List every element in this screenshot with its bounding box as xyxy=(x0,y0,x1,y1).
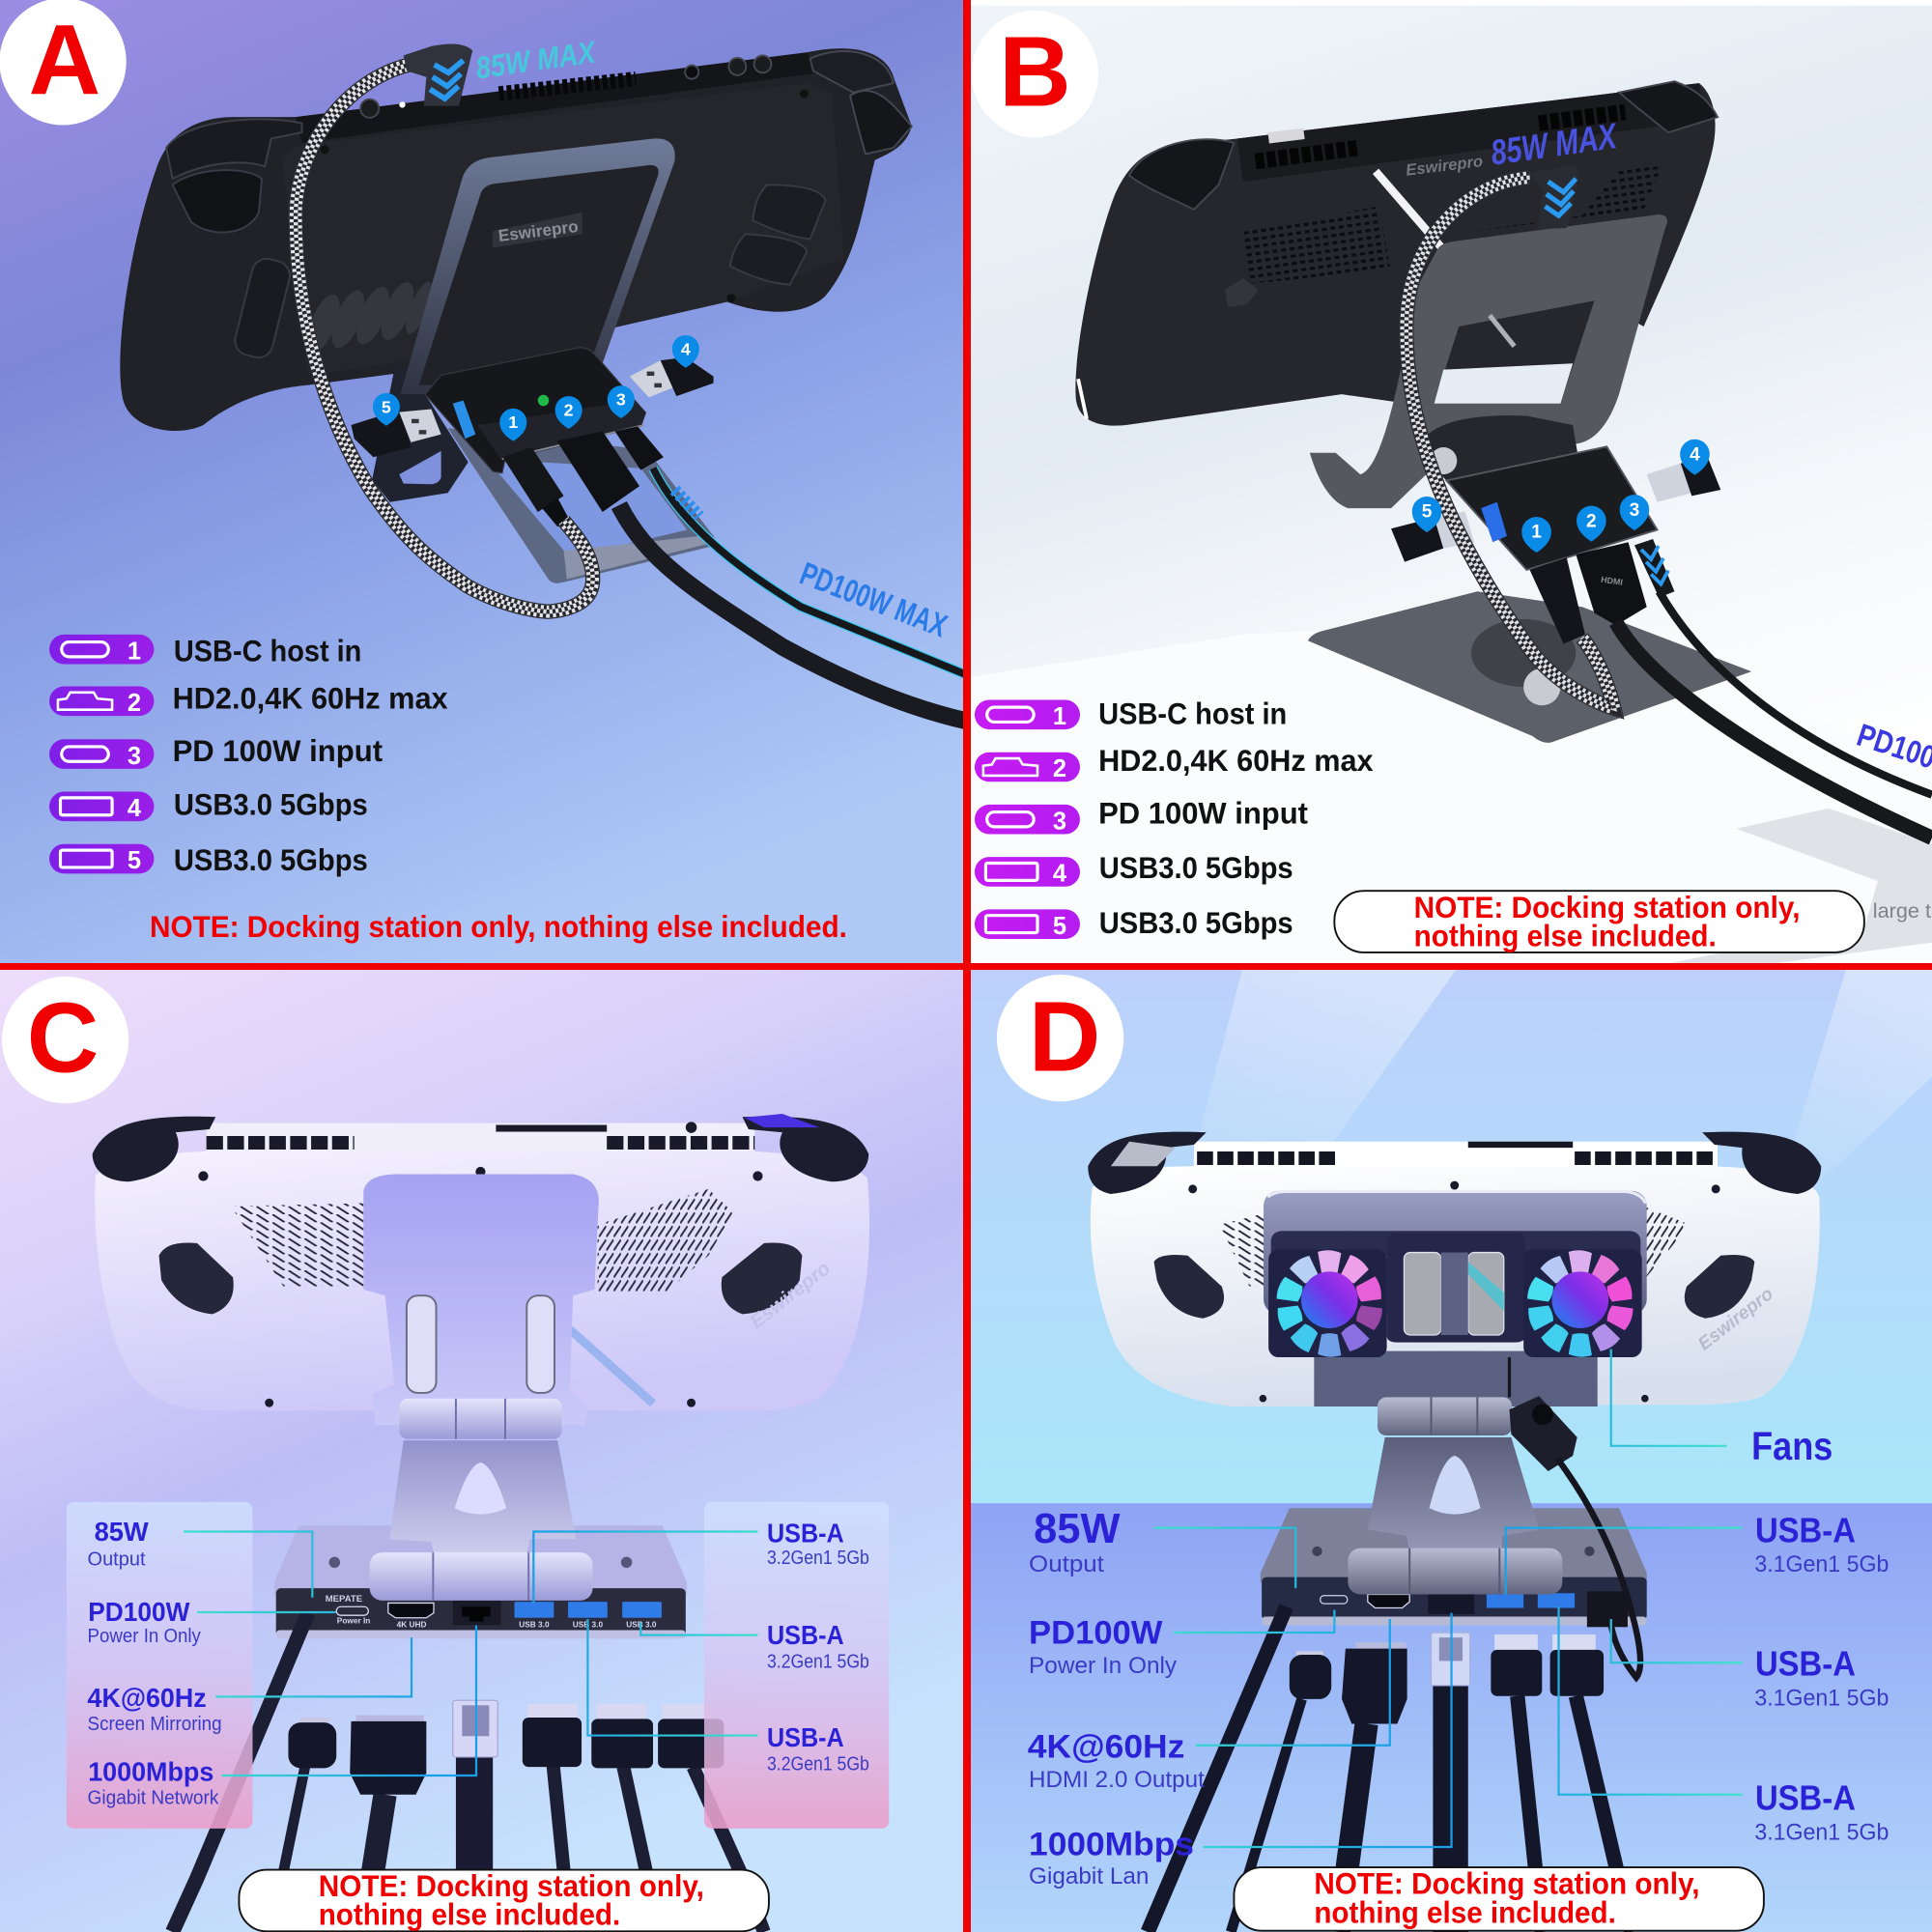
port pin 1 xyxy=(499,409,526,441)
port pin 3: 3 xyxy=(616,390,626,410)
legend row 1: USB-C host in xyxy=(1098,696,1287,730)
left labels D: PD100W xyxy=(1029,1615,1163,1652)
legend row 3: 3 xyxy=(1053,808,1066,835)
dock hub A xyxy=(425,348,664,526)
USB dongles B xyxy=(1391,459,1720,562)
legend row 2 xyxy=(49,680,448,717)
right labels D: USB-A xyxy=(1755,1511,1856,1549)
legend row 5: USB3.0 5Gbps xyxy=(174,842,368,877)
red divider horizontal xyxy=(0,963,1932,970)
dock body C: USB 3.0 xyxy=(519,1619,550,1629)
panel C: white handheld dock with cables xyxy=(0,970,963,1932)
port pin 3 xyxy=(608,385,635,418)
device B xyxy=(1075,81,1718,426)
legend row 3 xyxy=(49,733,383,770)
USB dongles A xyxy=(352,357,714,457)
right labels C: 3.2Gen1 5Gb xyxy=(767,1548,869,1569)
legend row 1: 1 xyxy=(1053,703,1066,730)
badge D: D xyxy=(1029,980,1100,1092)
port pin 2: 2 xyxy=(564,400,574,419)
dock body C: Power In xyxy=(337,1615,370,1625)
port pin 4: 4 xyxy=(1690,444,1700,465)
right labels C xyxy=(767,1518,869,1775)
port pin 3: 3 xyxy=(1630,500,1639,521)
legend row 1 xyxy=(975,696,1287,730)
dock hub B: HDMI xyxy=(1601,575,1624,587)
right labels C: USB-A xyxy=(767,1620,844,1650)
right fan xyxy=(1526,1250,1634,1357)
legend row 3: 3 xyxy=(128,743,141,770)
legend row 4: USB3.0 5Gbps xyxy=(174,787,368,822)
left labels C: 4K@60Hz xyxy=(88,1683,207,1713)
dock body D xyxy=(1261,1508,1647,1627)
left labels C: Gigabit Network xyxy=(88,1787,219,1808)
note B: NOTE: Docking station only, xyxy=(1414,890,1801,924)
port pin 3 xyxy=(1620,495,1649,530)
legend row 3 xyxy=(975,796,1308,835)
power labels A: 85W MAX xyxy=(473,34,599,86)
power labels A xyxy=(473,34,952,644)
note D xyxy=(1234,1865,1764,1931)
right labels D: USB-A xyxy=(1755,1779,1856,1818)
info box right C xyxy=(704,1502,889,1829)
badge D xyxy=(997,975,1123,1101)
device C xyxy=(93,1114,869,1411)
left labels D: 4K@60Hz xyxy=(1028,1729,1184,1766)
legend row 5: 5 xyxy=(1053,913,1066,940)
note A: NOTE: Docking station only, nothing else included. xyxy=(150,909,847,944)
right labels D: 3.1Gen1 5Gb xyxy=(1754,1819,1889,1845)
port pin 2 xyxy=(1577,506,1606,542)
panel D: handheld dock with cooling fans xyxy=(971,970,1932,1932)
right labels D: USB-A xyxy=(1755,1645,1856,1684)
dock body C: USB 3.0 xyxy=(573,1619,603,1629)
left labels D: Power In Only xyxy=(1029,1653,1178,1679)
left labels D: HDMI 2.0 Output xyxy=(1029,1767,1205,1793)
left labels D: 1000Mbps xyxy=(1029,1826,1194,1862)
L plug A xyxy=(404,43,472,106)
port pin 4 xyxy=(1680,440,1710,475)
stand D xyxy=(1264,1191,1647,1551)
callout lines D xyxy=(1154,1350,1743,1847)
legend row 1: USB-C host in xyxy=(174,633,361,668)
port pin 2 xyxy=(555,396,582,429)
port pin 5: 5 xyxy=(382,397,391,416)
device A xyxy=(120,48,912,431)
panel B: ROG Ally dock on swivel stand: large t xyxy=(1873,898,1931,923)
legend row 2: 2 xyxy=(1053,755,1066,782)
fan switch and cable D xyxy=(1509,1357,1640,1678)
panel A: Steam Deck dock xyxy=(0,0,963,963)
legend row 4: USB3.0 5Gbps xyxy=(1099,850,1293,885)
legend row 5: 5 xyxy=(128,847,141,874)
legend row 3: PD 100W input xyxy=(173,733,383,768)
device D xyxy=(1088,1132,1821,1406)
legend row 3: PD 100W input xyxy=(1098,796,1308,831)
stand A: Eswirepro xyxy=(497,216,580,245)
badge C xyxy=(2,977,128,1103)
port pin 1: 1 xyxy=(1531,523,1542,543)
base plate B xyxy=(1308,591,1751,743)
badge B xyxy=(972,11,1098,137)
right labels D xyxy=(1754,1511,1889,1845)
cables B xyxy=(1406,178,1932,838)
left labels D xyxy=(1028,1506,1205,1889)
port pin 4 xyxy=(672,335,699,368)
left labels D: Gigabit Lan xyxy=(1029,1863,1149,1889)
port pin 5 xyxy=(373,393,400,426)
callout lines C xyxy=(184,1531,757,1776)
badge C: C xyxy=(27,981,99,1094)
power labels B: 85W MAX xyxy=(1489,116,1621,173)
right labels C: 3.2Gen1 5Gb xyxy=(767,1753,869,1775)
panel B: ROG Ally dock on swivel stand xyxy=(971,6,1932,963)
red divider vertical xyxy=(963,0,971,1932)
legend row 4 xyxy=(49,787,368,822)
port pin 5 xyxy=(1412,497,1441,532)
device B: Eswirepro xyxy=(1405,152,1484,180)
dock body C xyxy=(274,1525,687,1638)
left labels C: Screen Mirroring xyxy=(88,1714,222,1735)
legend row 4: 4 xyxy=(128,795,142,822)
dock hinge C xyxy=(370,1552,593,1601)
port pin 5: 5 xyxy=(1422,502,1433,523)
left labels C: Power In Only xyxy=(88,1626,202,1647)
left labels C: Output xyxy=(88,1549,146,1571)
legend row 1 xyxy=(49,633,361,668)
left labels C: 1000Mbps xyxy=(88,1757,213,1787)
legend row 4: 4 xyxy=(1053,861,1067,888)
legend row 1: 1 xyxy=(128,638,141,665)
legend row 4 xyxy=(975,850,1293,888)
port pin 1: 1 xyxy=(508,412,518,432)
fans label: Fans xyxy=(1751,1424,1833,1468)
legend row 2: HD2.0,4K 60Hz max xyxy=(173,680,448,715)
right labels C: USB-A xyxy=(767,1518,844,1548)
port pin 2: 2 xyxy=(1586,511,1597,531)
note B: nothing else included. xyxy=(1414,919,1717,953)
device C: Eswirepro xyxy=(747,1258,835,1333)
stand A xyxy=(372,138,715,583)
stand C xyxy=(363,1175,653,1554)
info box left C xyxy=(67,1502,252,1829)
L plug B xyxy=(1530,165,1579,229)
power labels B xyxy=(1489,116,1932,777)
legend row 5: USB3.0 5Gbps xyxy=(1099,905,1293,940)
cables A xyxy=(296,65,966,721)
left labels C xyxy=(88,1517,222,1808)
dock hinge D xyxy=(1348,1548,1562,1595)
left labels D: Output xyxy=(1029,1551,1104,1577)
device D: Eswirepro xyxy=(1694,1284,1777,1355)
left fan xyxy=(1275,1250,1384,1357)
fan unit D xyxy=(1268,1231,1642,1357)
legend row 2: HD2.0,4K 60Hz max xyxy=(1098,743,1374,778)
right labels D: 3.1Gen1 5Gb xyxy=(1754,1551,1889,1577)
badge A xyxy=(0,0,127,125)
note C xyxy=(239,1868,769,1931)
dock hub B xyxy=(1446,446,1674,643)
note B xyxy=(1334,890,1864,953)
note C: NOTE: Docking station only, xyxy=(319,1868,704,1903)
legend row 5 xyxy=(975,905,1293,940)
right labels D: 3.1Gen1 5Gb xyxy=(1754,1685,1889,1711)
dock body C: MEPATE xyxy=(326,1594,362,1605)
dock body C: 4K UHD xyxy=(397,1619,426,1629)
port pin 1 xyxy=(1521,517,1551,553)
note C: nothing else included. xyxy=(319,1896,620,1931)
legend row 2: 2 xyxy=(128,690,141,717)
port pin 4: 4 xyxy=(681,339,691,358)
dock body C: USB 3.0 xyxy=(626,1619,657,1629)
note D: NOTE: Docking station only, xyxy=(1314,1865,1700,1900)
cables and connectors D xyxy=(1148,1606,1632,1932)
badge A: A xyxy=(29,3,100,115)
legend row 2 xyxy=(975,743,1374,782)
note D: nothing else included. xyxy=(1314,1894,1616,1929)
badge B: B xyxy=(999,15,1071,128)
stand B xyxy=(1310,214,1667,508)
right labels C: USB-A xyxy=(767,1722,844,1752)
legend row 5 xyxy=(49,842,368,877)
left labels C: PD100W xyxy=(88,1597,190,1627)
left labels D: 85W xyxy=(1034,1506,1121,1552)
left labels C: 85W xyxy=(95,1517,149,1547)
cables and connectors C xyxy=(173,1613,764,1932)
right labels C: 3.2Gen1 5Gb xyxy=(767,1651,869,1672)
